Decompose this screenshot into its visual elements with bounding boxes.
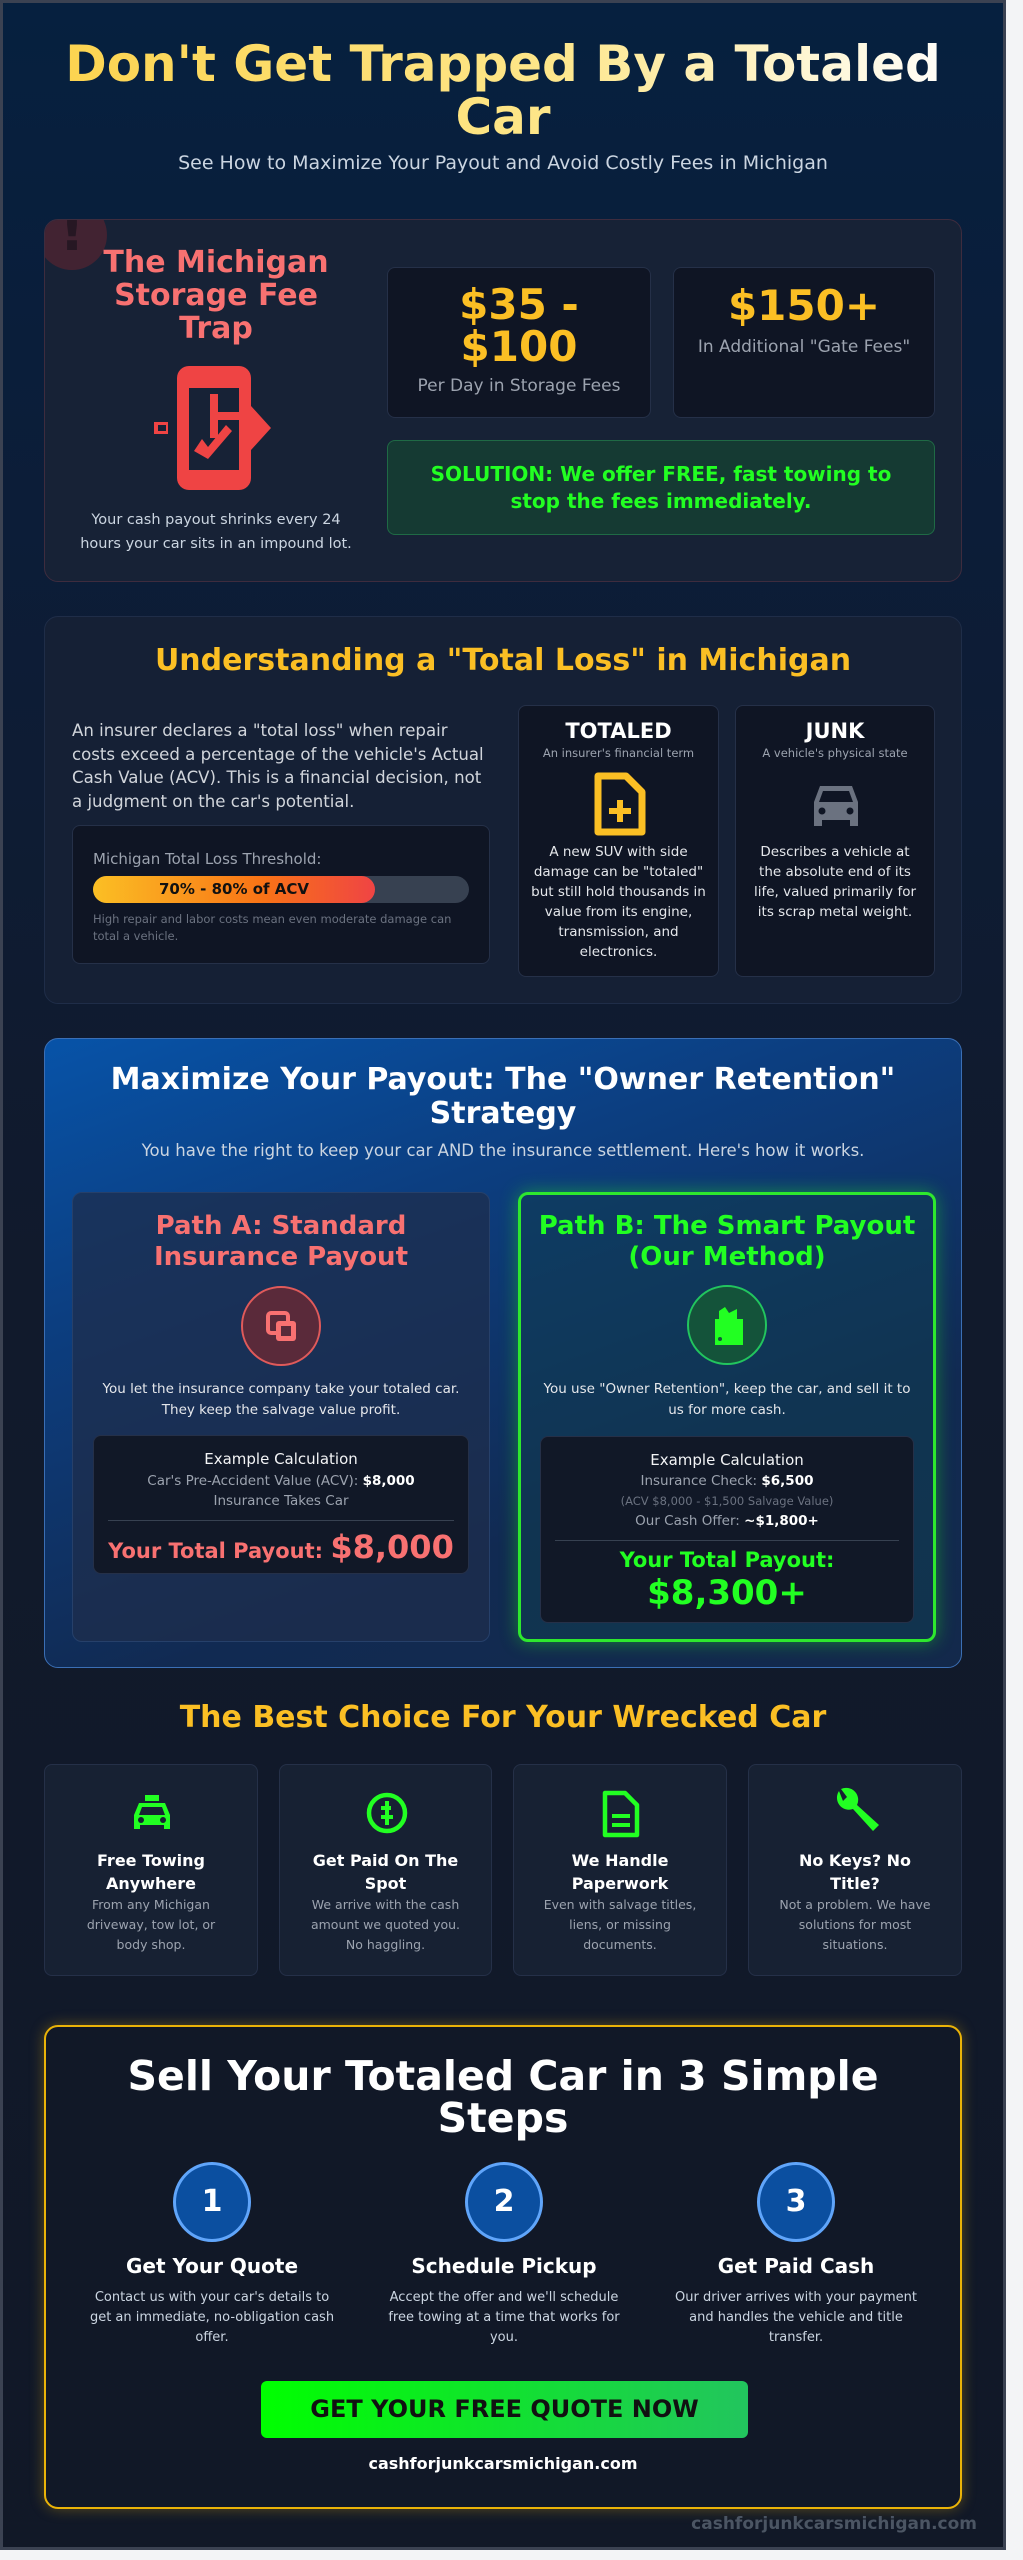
text: definition <box>72 721 484 810</box>
title: Don't Get Trapped By a Totaled Car <box>65 35 941 146</box>
icon: impound <box>154 366 271 490</box>
heading: owner retention: Strategy <box>430 1096 576 1131</box>
feature: free towing: Free Towing <box>97 1851 205 1870</box>
card: path A <box>72 1192 490 1642</box>
chart: threshold bar: High repair and labor costs mean even moderate damage can total a vehicle. <box>93 912 451 943</box>
stat: gate fees <box>673 267 935 418</box>
icon: warning badge <box>37 200 107 270</box>
calc: path B: Insurance Check: $6,500 <box>640 1473 814 1489</box>
calc: path A <box>93 1435 469 1574</box>
feature: no keys: Not a problem. We have solutions for most situations. <box>779 1897 931 1952</box>
icon: copy <box>241 1286 321 1366</box>
text: definition: costs exceed a percentage of the vehicle's Actual <box>72 744 484 764</box>
calc: path A: Example Calculation <box>204 1450 358 1468</box>
step 3: Our driver arrives with your payment and handles the vehicle and title transfer. <box>675 2290 917 2345</box>
step 3: Get Paid Cash <box>718 2254 874 2278</box>
icon: document <box>602 1790 640 1838</box>
card: totaled: TOTALED <box>565 719 672 743</box>
feature: no keys: No Keys? No <box>799 1851 911 1870</box>
card: path B: (Our Method) <box>628 1242 826 1272</box>
step 3 <box>675 2162 917 2345</box>
step 1: Contact us with your car's details to get an immediate, no-obligation cash offer. <box>90 2290 334 2345</box>
feature: paid on spot <box>279 1764 492 1976</box>
feature: paperwork: Paperwork <box>572 1874 668 1893</box>
card: junk <box>735 705 935 977</box>
step 1 <box>90 2162 334 2345</box>
calc: path A: Your Total Payout: $8,000 <box>108 1528 454 1566</box>
icon: car <box>814 786 858 826</box>
card: path B <box>518 1192 936 1642</box>
icon: tow truck <box>134 1795 170 1829</box>
card: path B: us for more cash. <box>668 1402 786 1418</box>
calc: path A: Car's Pre-Accident Value (ACV): $8,000 <box>147 1473 415 1489</box>
heading: best choice: The Best Choice For Your Wrecked Car <box>180 1700 826 1735</box>
feature: paperwork: We Handle <box>572 1851 668 1870</box>
card: path A: You let the insurance company take your totaled car. <box>103 1381 459 1397</box>
stat: daily storage <box>387 267 651 418</box>
panel: total loss <box>44 616 962 1004</box>
icon: wallet <box>687 1285 767 1365</box>
button: free quote: GET YOUR FREE QUOTE NOW <box>310 2395 699 2423</box>
card: path A: They keep the salvage value profit. <box>162 1402 400 1418</box>
calc: path B <box>540 1436 914 1623</box>
calc: path B: (ACV $8,000 - $1,500 Salvage Value) <box>621 1494 833 1508</box>
button: free quote <box>261 2381 748 2438</box>
feature: paid on spot: We arrive with the cash amount we quoted you. No haggling. <box>311 1897 460 1952</box>
card: path A: Path A: Standard <box>156 1211 406 1241</box>
text: definition: Cash Value (ACV). This is a financial decision, not <box>72 768 481 787</box>
stat: gate fees: $150+ <box>728 281 880 330</box>
card: totaled: A new SUV with side damage can be "totaled" but still hold thousands in value from its engine, transmission, and electronics. <box>531 844 706 960</box>
stat: daily storage: $100 <box>461 322 577 371</box>
panel: storage fee trap <box>44 219 962 582</box>
stat: daily storage: $35 - <box>459 280 579 329</box>
callout: solution <box>387 440 935 535</box>
step 3: 3 <box>786 2184 806 2219</box>
feature: free towing: Anywhere <box>106 1874 196 1893</box>
calc: path A: Insurance Takes Car <box>213 1493 349 1509</box>
icon: wrench <box>836 1788 879 1831</box>
callout: solution: SOLUTION: We offer FREE, fast towing to <box>431 462 891 486</box>
step 2: Schedule Pickup <box>411 2254 597 2278</box>
card: path B: You use "Owner Retention", keep the car, and sell it to <box>543 1381 910 1397</box>
subtitle: owner retention: You have the right to keep your car AND the insurance settlement. Here's how it works. <box>142 1141 864 1160</box>
heading: total loss: Understanding a "Total Loss" in Michigan <box>155 643 851 678</box>
feature: no keys: Title? <box>830 1874 880 1893</box>
text: definition: a judgment on the car's potential. <box>72 792 354 810</box>
heading: owner retention <box>111 1062 895 1131</box>
step 2 <box>388 2162 620 2345</box>
card: totaled: An insurer's financial term <box>543 746 694 760</box>
heading: 3 steps: Steps <box>438 2094 568 2142</box>
feature: free towing <box>44 1764 258 1976</box>
calc: path B: Your Total Payout: <box>620 1548 834 1572</box>
heading: 3 steps <box>127 2052 878 2142</box>
panel: owner retention <box>44 1038 962 1668</box>
calc: path B: Example Calculation <box>650 1451 804 1469</box>
feature: paperwork: Even with salvage titles, liens, or missing documents. <box>544 1897 696 1952</box>
feature: paperwork <box>513 1764 727 1976</box>
chart: threshold bar: Michigan Total Loss Threshold: <box>93 850 321 868</box>
step 1: 1 <box>202 2184 222 2219</box>
card: junk: Describes a vehicle at the absolute end of its life, valued primarily for its scrap metal weight. <box>754 844 916 920</box>
text: payout shrinks: Your cash payout shrinks every 24 hours your car sits in an impound lot. <box>80 512 352 552</box>
card: path A: Insurance Payout <box>154 1242 408 1272</box>
icon: dollar circle <box>366 1792 408 1834</box>
icon: file plus <box>594 772 646 836</box>
feature: free towing: From any Michigan driveway, tow lot, or body shop. <box>87 1897 215 1952</box>
calc: path B: $8,300+ <box>647 1573 807 1613</box>
stat: gate fees: In Additional "Gate Fees" <box>698 337 910 357</box>
chart: threshold bar <box>72 825 490 964</box>
step 2: Accept the offer and we'll schedule free towing at a time that works for you. <box>388 2290 620 2345</box>
panel: 3 steps <box>44 2025 962 2509</box>
card: junk: A vehicle's physical state <box>762 746 908 760</box>
feature: paid on spot: Spot <box>365 1874 406 1893</box>
step 1: Get Your Quote <box>126 2254 298 2278</box>
feature: paid on spot: Get Paid On The <box>313 1851 458 1870</box>
chart: threshold bar: 70% - 80% of ACV <box>159 880 309 898</box>
calc: path B: Our Cash Offer: ~$1,800+ <box>635 1513 819 1529</box>
subtitle: See How to Maximize Your Payout and Avoid Costly Fees in Michigan <box>178 152 828 174</box>
text: url: cashforjunkcarsmichigan.com <box>368 2454 638 2473</box>
stat: daily storage: Per Day in Storage Fees <box>418 376 620 396</box>
step 2: 2 <box>494 2184 514 2219</box>
callout: solution: stop the fees immediately. <box>510 489 812 513</box>
heading: 3 steps: Sell Your Totaled Car in 3 Simple <box>127 2052 878 2100</box>
card: junk: JUNK <box>806 719 864 743</box>
text: definition: An insurer declares a "total loss" when repair <box>72 721 448 740</box>
footer watermark: cashforjunkcarsmichigan.com <box>691 2514 977 2534</box>
feature: no keys <box>748 1764 962 1976</box>
heading: owner retention: Maximize Your Payout: The "Owner Retention" <box>111 1062 895 1097</box>
card: totaled <box>518 705 719 977</box>
card: path B: Path B: The Smart Payout <box>539 1211 915 1241</box>
heading: storage fee trap: The Michigan Storage Fee Trap <box>103 245 329 346</box>
